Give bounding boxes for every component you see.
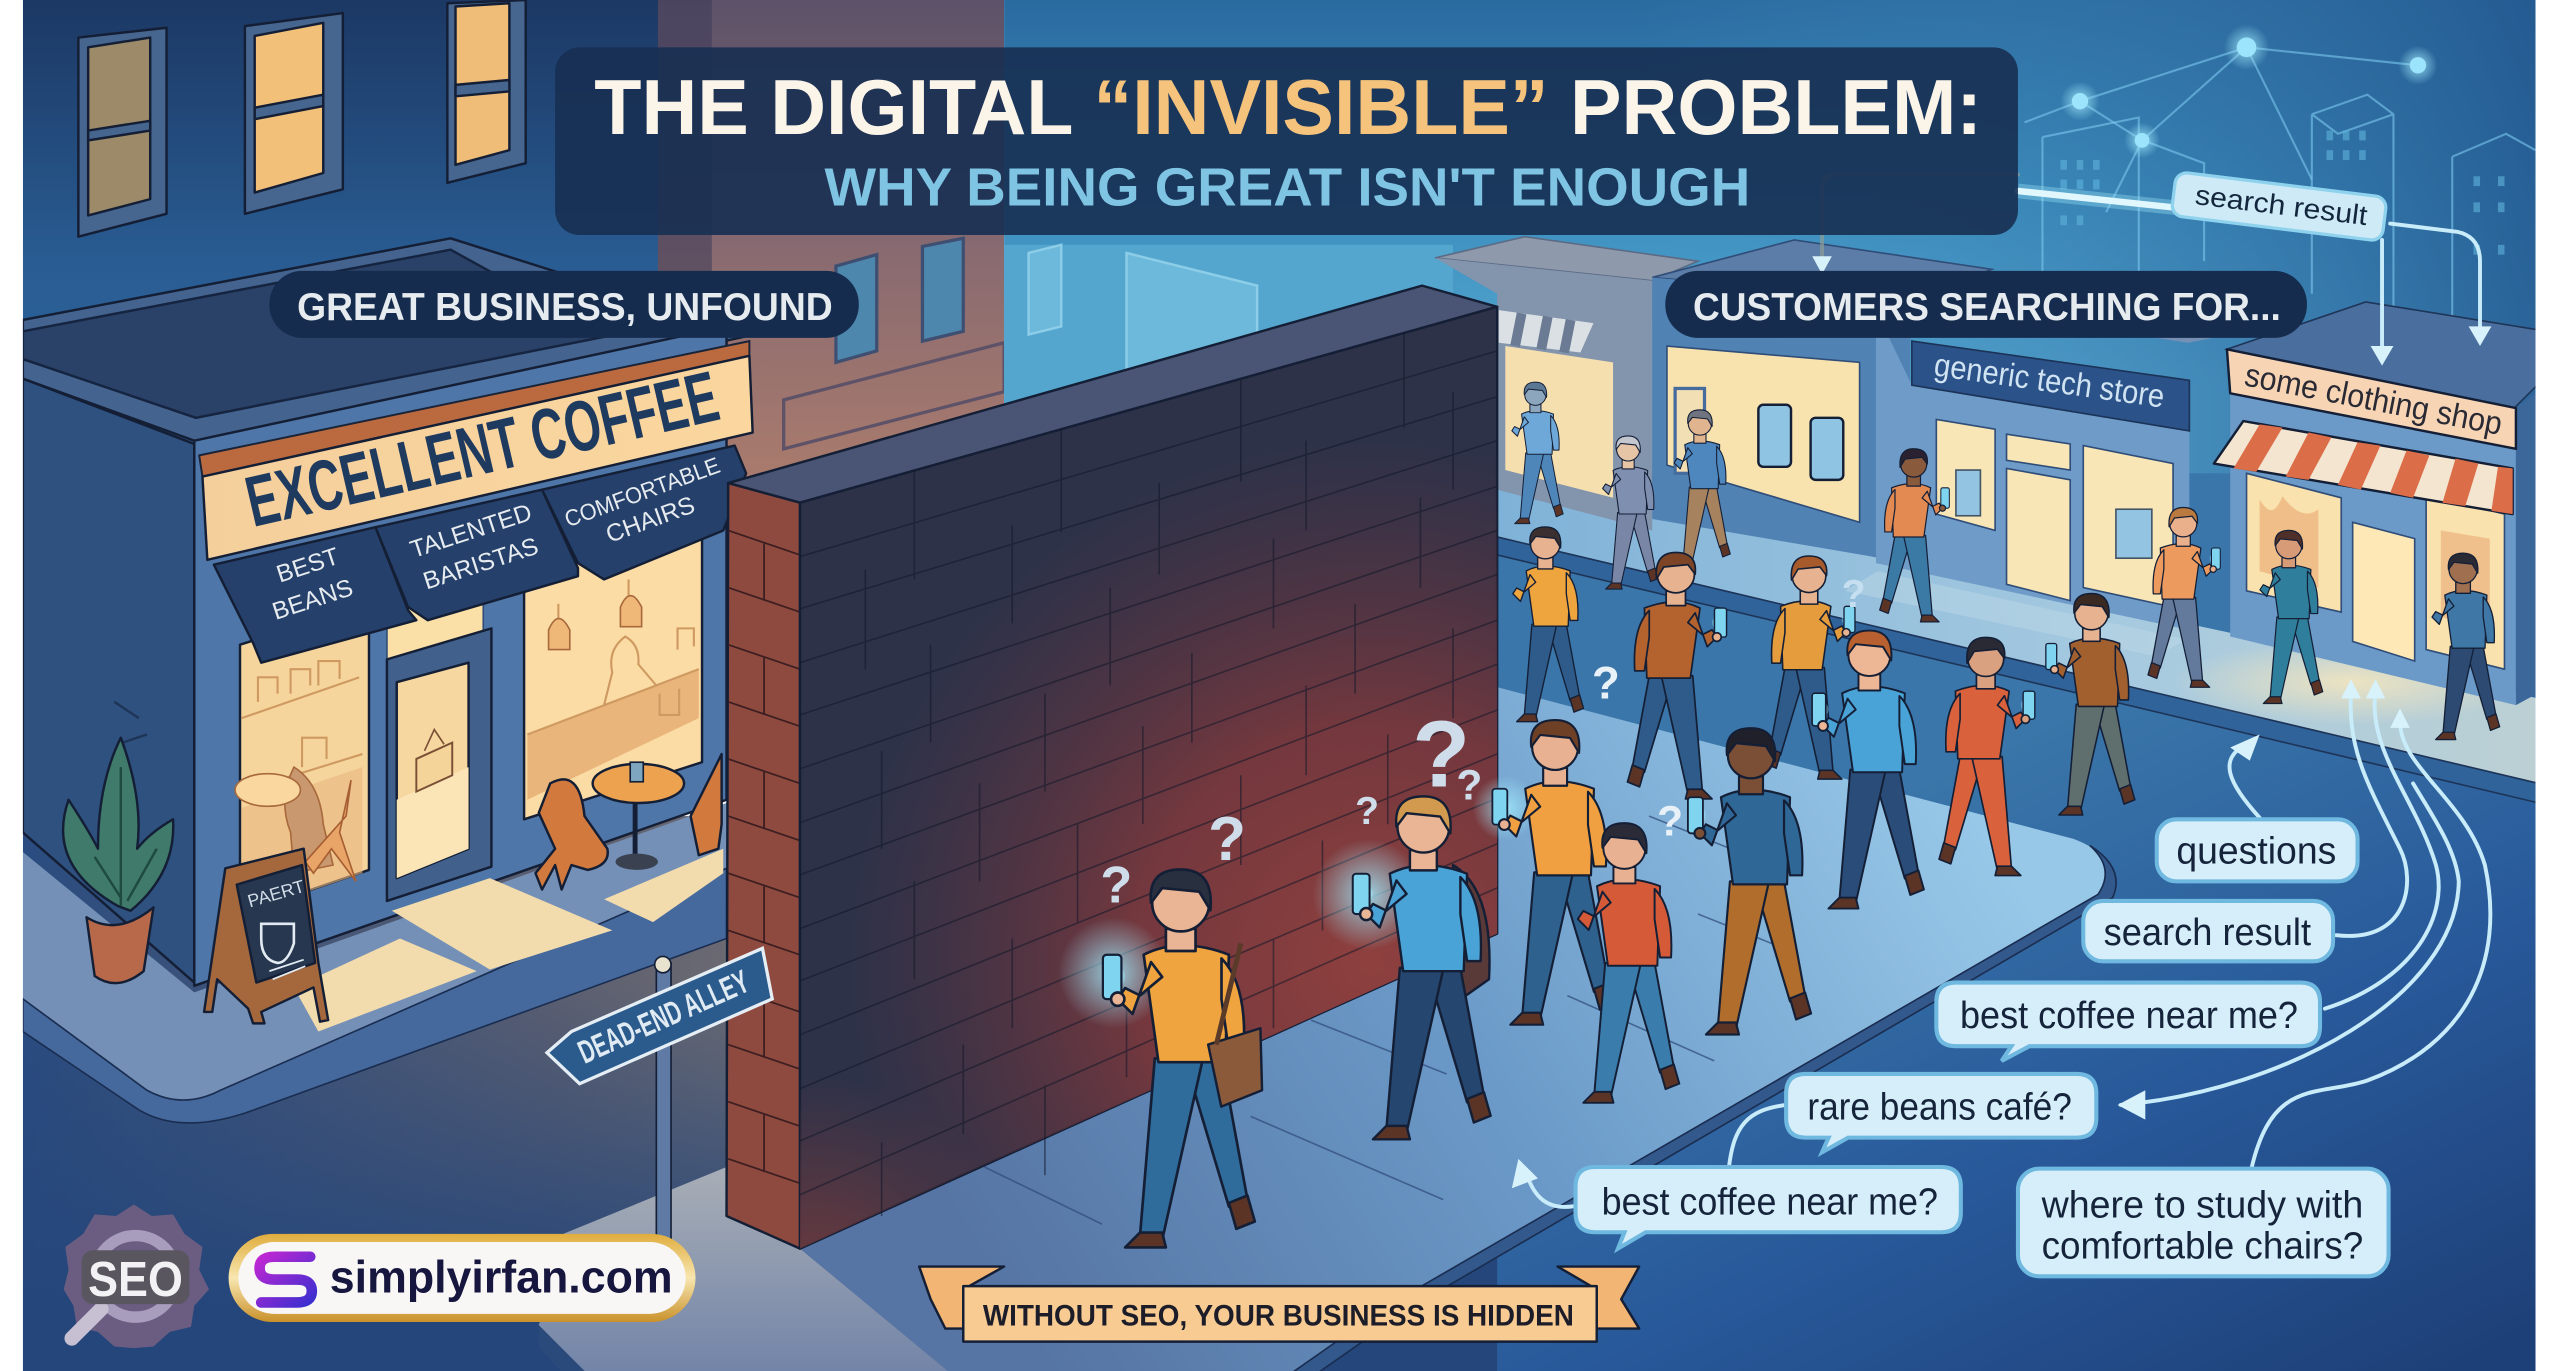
bubble: best coffee near me second bbox=[1576, 1167, 1961, 1249]
far sidewalk bbox=[1497, 477, 2539, 783]
heading: great business unfound: GREAT BUSINESS, UNFOUND bbox=[297, 286, 833, 329]
question marks: ? bbox=[1355, 790, 1379, 833]
wall top bbox=[728, 286, 1497, 503]
icon: seo gear badge: SEO bbox=[88, 1253, 183, 1307]
shop: clothing shop bbox=[2214, 302, 2537, 705]
bubble: best coffee near me second: best coffee near me? bbox=[1602, 1180, 1938, 1222]
icon: potted plant bbox=[63, 738, 173, 983]
heading: customers searching for bbox=[1665, 271, 2307, 338]
bubble: rare beans cafe bbox=[1786, 1074, 2096, 1152]
street base bbox=[727, 473, 2542, 1371]
awning: comfortable chairs: COMFORTABLE bbox=[561, 452, 723, 532]
sign: excellent coffee: EXCELLENT COFFEE bbox=[239, 357, 726, 543]
awning: talented baristas: BARISTAS bbox=[420, 533, 542, 595]
shop: generic tech store bbox=[1876, 286, 2230, 630]
awning: best beans: BEANS bbox=[269, 574, 356, 626]
sidewalk bbox=[23, 803, 727, 1100]
roof bbox=[23, 238, 754, 455]
crowd: near pedestrians bbox=[1473, 720, 1811, 1103]
bubble: questions bbox=[2157, 819, 2358, 881]
label: search result bbox=[2171, 172, 2387, 241]
bubble: search result bbox=[2083, 901, 2333, 961]
cafe building bbox=[23, 238, 754, 1123]
logo: simplyirfan.com: simplyirfan.com bbox=[330, 1252, 673, 1303]
brick wall bbox=[727, 286, 1497, 1249]
icon: a-frame menu board bbox=[204, 849, 328, 1023]
sign: dead-end alley: DEAD-END ALLEY bbox=[572, 962, 755, 1071]
bubble: search result: search result bbox=[2104, 911, 2312, 953]
icon: a-frame menu board: PAERT bbox=[245, 876, 307, 911]
left road bbox=[23, 816, 733, 1371]
shop: phone store bbox=[1652, 240, 1992, 563]
sidewalks bbox=[539, 687, 2116, 1371]
side wall bbox=[23, 379, 194, 983]
title panel bbox=[555, 47, 2018, 235]
awning: best beans: BEST bbox=[273, 543, 342, 588]
question marks: ? bbox=[1100, 857, 1132, 915]
awning: comfortable chairs bbox=[542, 446, 746, 579]
awning: talented baristas: TALENTED bbox=[407, 499, 535, 564]
bubble: questions: questions bbox=[2176, 829, 2336, 871]
sign: dead-end alley bbox=[547, 948, 772, 1240]
customer: man with orange sweater and glowing phone bbox=[1058, 869, 1262, 1247]
question marks: ? bbox=[1842, 573, 1866, 616]
facade bbox=[194, 326, 727, 986]
network and wireframe city bbox=[2024, 24, 2536, 359]
cafe tables and chairs bbox=[536, 754, 722, 890]
shop: far shop with awning bbox=[1435, 237, 1698, 530]
connectors to shops bbox=[1812, 175, 2491, 366]
bubble: best coffee near me: best coffee near me? bbox=[1960, 994, 2298, 1036]
question marks: ? bbox=[1208, 805, 1246, 874]
logo: simplyirfan.com bbox=[229, 1234, 696, 1322]
icon: upper windows bbox=[78, 0, 526, 237]
awning: talented baristas bbox=[376, 490, 578, 620]
sign: generic tech store: generic tech store bbox=[1932, 346, 2167, 415]
awning: best beans bbox=[214, 527, 416, 663]
crowd: far pedestrians bbox=[1512, 382, 2500, 740]
awning: clothing shop bbox=[2214, 421, 2513, 514]
icon: seo gear badge bbox=[64, 1205, 209, 1348]
question marks: ? bbox=[1592, 658, 1620, 709]
subtitle: WHY BEING GREAT ISN'T ENOUGH bbox=[824, 158, 1750, 218]
label: search result: search result bbox=[2194, 179, 2369, 231]
background: left apartment building bbox=[23, 0, 663, 522]
right window bbox=[524, 519, 702, 819]
bubble: rare beans cafe: rare beans café? bbox=[1807, 1086, 2072, 1128]
wall side bbox=[727, 483, 800, 1249]
background: brown centre building bbox=[658, 0, 1004, 522]
icon: s logo bbox=[260, 1257, 312, 1302]
background: blue sky and digital city bbox=[1004, 0, 2539, 555]
arrows from search bubbles bbox=[1512, 679, 2490, 1207]
question marks: ? bbox=[1412, 702, 1470, 808]
question marks: ? bbox=[1657, 798, 1683, 845]
sign: some clothing shop: some clothing shop bbox=[2242, 356, 2505, 442]
heading: customers searching for: CUSTOMERS SEARCHING FOR... bbox=[1693, 286, 2281, 329]
banner: without seo: WITHOUT SEO, YOUR BUSINESS IS HIDDEN bbox=[983, 1299, 1574, 1332]
bubble: best coffee near me bbox=[1936, 983, 2320, 1061]
question marks bbox=[1100, 573, 1866, 915]
awning: comfortable chairs: CHAIRS bbox=[602, 492, 699, 549]
icon: tablets in window bbox=[1758, 405, 1843, 480]
crowd: middle pedestrians bbox=[1513, 527, 2135, 909]
banner: without seo bbox=[919, 1267, 1639, 1342]
bubble: where to study bbox=[2018, 1169, 2389, 1276]
heading: great business unfound bbox=[269, 271, 859, 338]
question marks: ? bbox=[1456, 762, 1482, 809]
bubble: where to study: where to study with bbox=[2041, 1184, 2363, 1226]
left window bbox=[240, 604, 369, 914]
sign: excellent coffee bbox=[199, 341, 753, 560]
wall front bbox=[800, 307, 1497, 1249]
bubble: where to study: comfortable chairs? bbox=[2042, 1224, 2363, 1266]
customer: man with blue shirt and glowing tablet bbox=[1313, 796, 1491, 1139]
door bbox=[387, 588, 483, 682]
title: THE DIGITAL “INVISIBLE” PROBLEM: bbox=[594, 63, 1982, 151]
